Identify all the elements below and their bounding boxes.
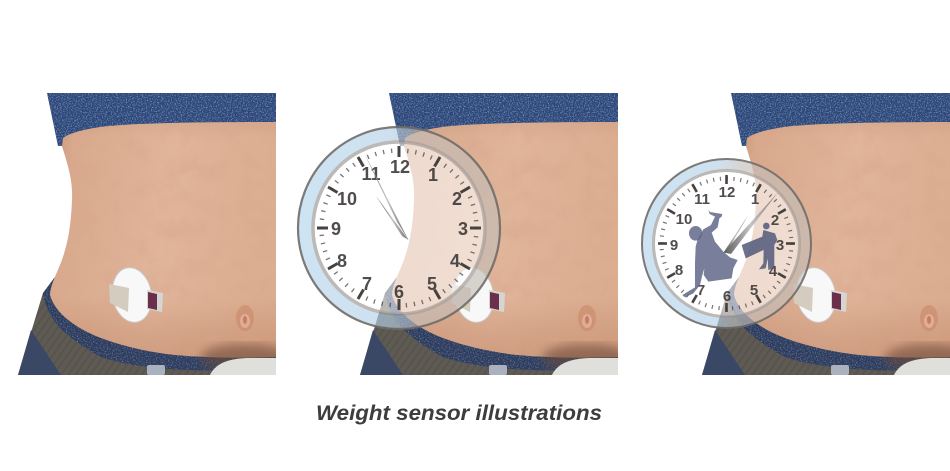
caption: Weight sensor illustrations (316, 402, 602, 425)
clock numbers: 1 (751, 191, 759, 208)
clock numbers: 7 (697, 282, 705, 299)
clock numbers: 5 (427, 274, 437, 294)
clock numbers: 5 (750, 282, 758, 299)
clock numbers: 2 (771, 212, 779, 229)
icon: standing worker carrying board (742, 223, 777, 270)
clock hands (724, 193, 778, 254)
clock numbers: 10 (337, 189, 357, 209)
clock numbers: 11 (361, 164, 381, 184)
clock numbers: 11 (694, 191, 710, 208)
clock numbers: 10 (676, 211, 692, 228)
clock numbers: 8 (337, 251, 347, 271)
clock numbers: 9 (331, 219, 341, 239)
clock numbers: 2 (452, 189, 462, 209)
panel: abdomen with clock and workers (702, 93, 950, 375)
panel: abdomen with clock (360, 93, 632, 375)
clock numbers: 3 (458, 219, 468, 239)
clock hands (364, 153, 408, 240)
clock numbers: 12 (390, 157, 410, 177)
clock numbers: 6 (394, 282, 404, 302)
clock: small clock overlay with workers (642, 159, 811, 328)
clock: large clock overlay (298, 127, 500, 329)
clock numbers: 3 (776, 237, 784, 254)
clock numbers: 9 (670, 237, 678, 254)
panel: abdomen with sensor (18, 93, 290, 375)
clock numbers (331, 157, 468, 302)
clock numbers: 4 (450, 251, 460, 271)
clock numbers: 6 (723, 288, 731, 305)
clock numbers: 7 (362, 274, 372, 294)
clock numbers: 4 (769, 263, 778, 280)
clock numbers (670, 184, 784, 305)
icon: kneeling worker with hammer (682, 210, 738, 297)
clock numbers: 12 (719, 184, 735, 201)
clock numbers: 1 (428, 165, 438, 185)
clock numbers: 8 (675, 262, 683, 279)
